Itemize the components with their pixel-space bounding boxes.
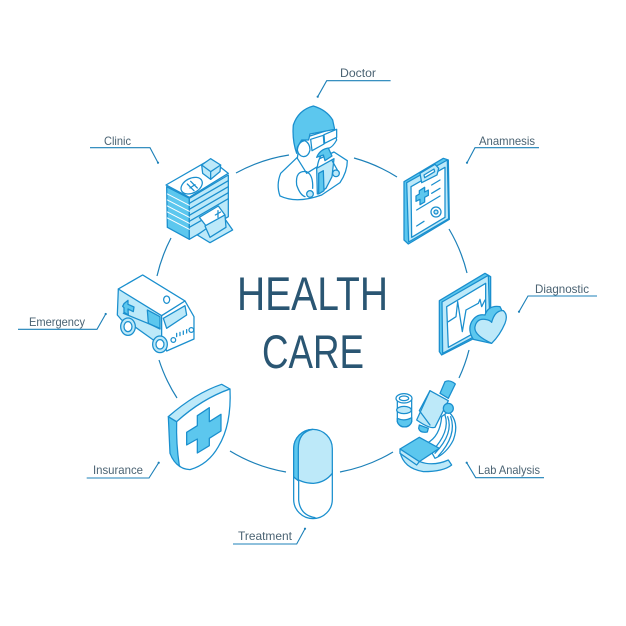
label: Doctor	[317, 66, 391, 98]
label: Insurance	[87, 462, 160, 478]
label: Anamnesis	[466, 134, 539, 164]
label: Doctor: Doctor	[340, 66, 376, 80]
title: CARE	[262, 325, 364, 378]
icon: anamnesis clipboard	[404, 158, 449, 244]
title	[237, 267, 388, 378]
label: Lab Analysis: Lab Analysis	[478, 463, 540, 477]
ring of connecting arcs	[157, 155, 469, 472]
label: Clinic: Clinic	[104, 134, 131, 148]
icon: doctor	[278, 106, 347, 200]
label: Treatment	[233, 528, 306, 544]
label: Diagnostic: Diagnostic	[535, 282, 589, 296]
label: Treatment: Treatment	[238, 529, 293, 543]
icon: insurance shield	[168, 384, 230, 470]
icon: emergency ambulance	[117, 275, 194, 353]
icon: treatment capsule	[294, 429, 332, 519]
title: HEALTH	[237, 267, 388, 320]
icon: diagnostic monitor with heart	[439, 273, 506, 355]
label: Clinic	[90, 134, 159, 164]
label: Emergency: Emergency	[29, 315, 85, 329]
label: Emergency	[18, 313, 107, 329]
label: Insurance: Insurance	[93, 463, 143, 477]
icon: clinic building	[166, 159, 233, 243]
icon: lab microscope and test tube	[396, 381, 456, 472]
label: Diagnostic	[518, 282, 597, 313]
label: Anamnesis: Anamnesis	[479, 134, 535, 148]
